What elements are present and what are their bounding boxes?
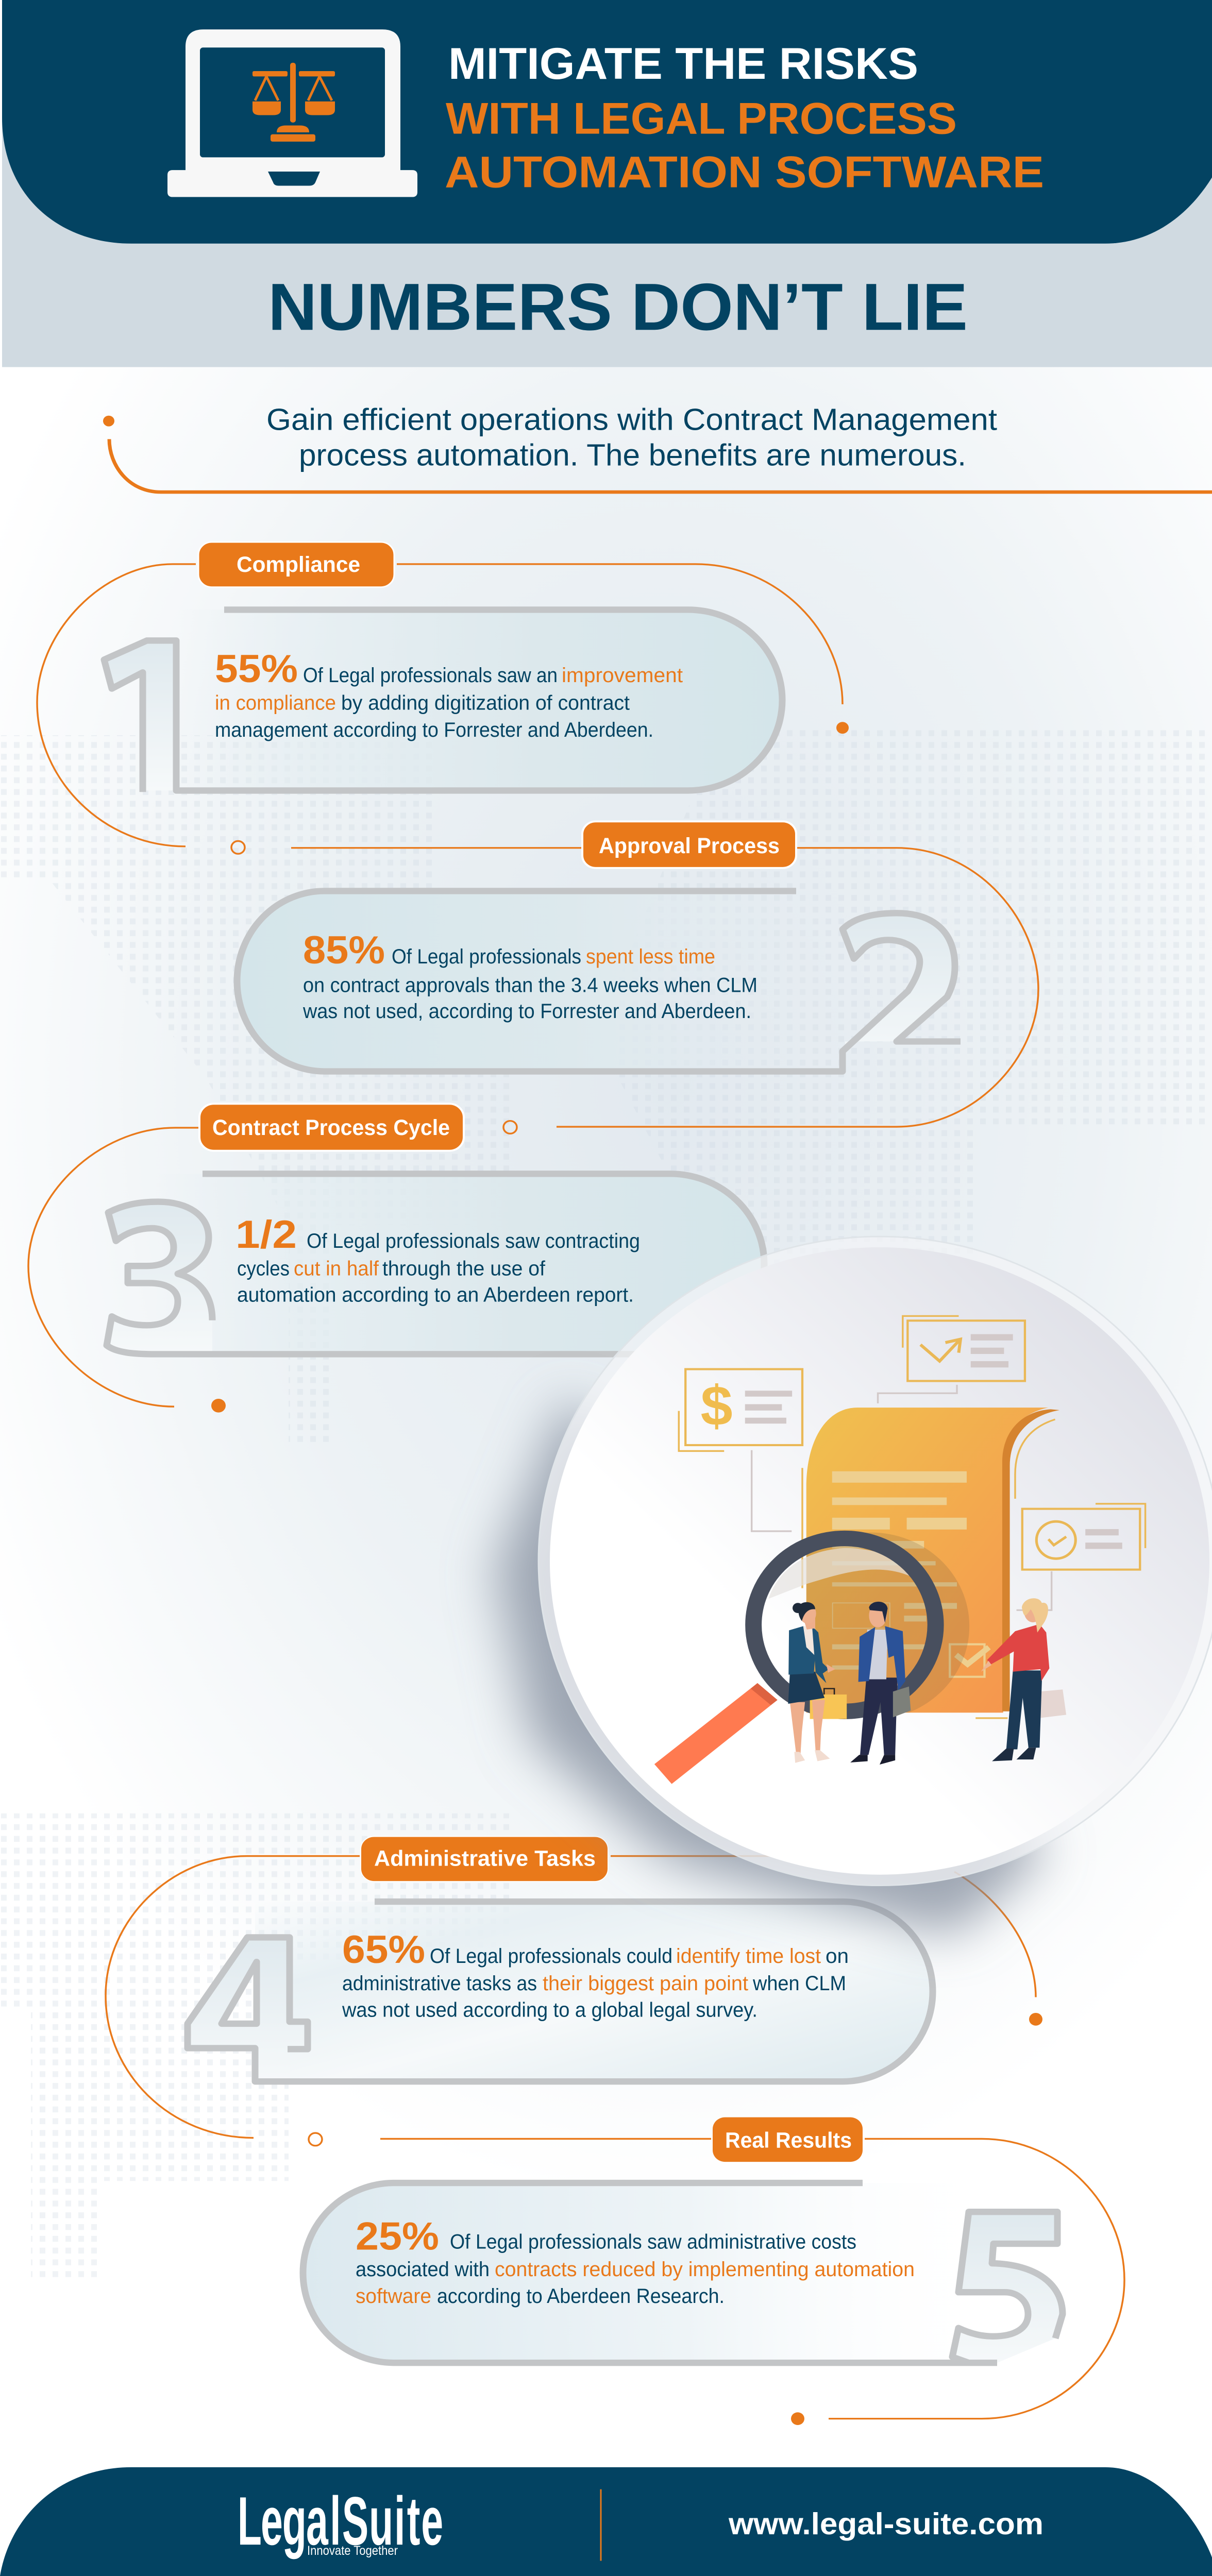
text: contract cycle stat: automation according to an Aberdeen report.	[237, 1283, 634, 1306]
logo: LegalSuite: Innovate Together	[307, 2544, 398, 2558]
text: contract cycle stat: through the use of	[382, 1257, 546, 1280]
illustration circle	[538, 1236, 1212, 1886]
text: compliance stat: management according to Forrester and Aberdeen.	[215, 718, 653, 741]
heading: numbers don't lie: NUMBERS DON’T LIE	[268, 270, 968, 344]
figure: woman with yellow bag	[788, 1602, 847, 1763]
title: MITIGATE THE RISKS	[448, 39, 918, 89]
text: real results stat: Of Legal professionals saw administrative costs	[450, 2230, 856, 2253]
panel: compliance	[37, 542, 849, 854]
text: approval stat: on contract approvals than the 3.4 weeks when CLM	[303, 973, 758, 996]
figure: man with grey bag	[850, 1602, 911, 1765]
text: administrative stat	[342, 1927, 849, 2021]
text: administrative stat: 65%	[342, 1927, 425, 1972]
text: administrative stat: their biggest pain point	[543, 1972, 749, 1995]
label: approval process	[582, 821, 796, 868]
icon: approved checkbox	[950, 1645, 989, 1677]
text: real results stat: software	[356, 2284, 431, 2308]
panel: contract process cycle	[28, 1104, 764, 1413]
text: administrative stat: when CLM	[752, 1972, 846, 1995]
text: contract cycle stat: Of Legal professionals saw contracting	[307, 1229, 640, 1252]
text: compliance stat: by adding digitization of contract	[341, 691, 630, 714]
label: contract process cycle: Contract Process Cycle	[212, 1115, 450, 1140]
text: administrative stat: identify time lost	[676, 1944, 821, 1968]
illustration: document review	[654, 1316, 1146, 1784]
text: approval stat: 85%	[303, 928, 385, 972]
text: contract cycle stat: 1/2	[235, 1212, 297, 1257]
panel: real results	[303, 2117, 1124, 2425]
label: approval process: Approval Process	[599, 834, 780, 858]
website url: www.legal-suite.com	[728, 2507, 1043, 2541]
text: real results stat: according to Aberdeen Research.	[437, 2284, 725, 2308]
text: compliance stat: improvement	[562, 664, 683, 687]
text: administrative stat: was not used according to a global legal survey.	[342, 1998, 758, 2021]
document	[802, 1408, 1059, 1718]
intro accent line	[103, 416, 1212, 492]
text: real results stat: contracts reduced by implementing automation	[495, 2258, 915, 2281]
intro text	[266, 402, 997, 472]
text: contract cycle stat	[235, 1212, 640, 1306]
icon: laptop with scales of justice	[167, 29, 417, 197]
intro text: process automation. The benefits are numerous.	[299, 438, 966, 472]
text: compliance stat: Of Legal professionals saw an	[303, 664, 558, 687]
panel: approval process	[237, 821, 1038, 1133]
text: contract cycle stat: cut in half	[294, 1257, 379, 1280]
figure: woman in red	[981, 1598, 1066, 1761]
text: compliance stat	[215, 647, 683, 741]
text: approval stat: was not used, according to Forrester and Aberdeen.	[302, 999, 751, 1023]
card: dollar: $	[701, 1374, 733, 1437]
text: real results stat	[356, 2214, 915, 2308]
title: WITH LEGAL PROCESS	[446, 94, 957, 143]
text: approval stat: Of Legal professionals	[392, 945, 581, 968]
text: approval stat: spent less time	[586, 945, 715, 968]
logo: LegalSuite: LegalSuite	[238, 2483, 443, 2560]
text: administrative stat: on	[826, 1944, 849, 1968]
label: real results	[713, 2117, 863, 2162]
label: real results: Real Results	[725, 2128, 852, 2153]
card: clock check	[1017, 1504, 1146, 1610]
header band	[2, 0, 1212, 367]
text: contract cycle stat: cycles	[237, 1257, 290, 1280]
text: compliance stat: in compliance	[215, 691, 336, 714]
text: compliance stat: 55%	[215, 647, 298, 691]
title: AUTOMATION SOFTWARE	[445, 147, 1044, 197]
card: trend check	[878, 1316, 1025, 1403]
text: administrative stat: Of Legal professionals could	[430, 1944, 672, 1968]
label: administrative tasks	[361, 1836, 608, 1882]
label: compliance: Compliance	[237, 552, 360, 577]
card: dollar	[679, 1369, 802, 1531]
title	[445, 39, 1044, 197]
circle shadow	[495, 1397, 1046, 1936]
footer band	[0, 2467, 1212, 2576]
label: contract process cycle	[199, 1104, 464, 1151]
panel: administrative tasks	[106, 1836, 1042, 2146]
intro text: Gain efficient operations with Contract Management	[266, 402, 997, 436]
label: administrative tasks: Administrative Tasks	[374, 1846, 596, 1871]
text: administrative stat: administrative tasks as	[342, 1972, 537, 1995]
text: approval stat	[302, 928, 758, 1023]
icon: magnifying glass	[654, 1533, 969, 1784]
text: real results stat: 25%	[356, 2214, 439, 2258]
text: real results stat: associated with	[356, 2258, 490, 2281]
label: compliance	[198, 542, 394, 587]
